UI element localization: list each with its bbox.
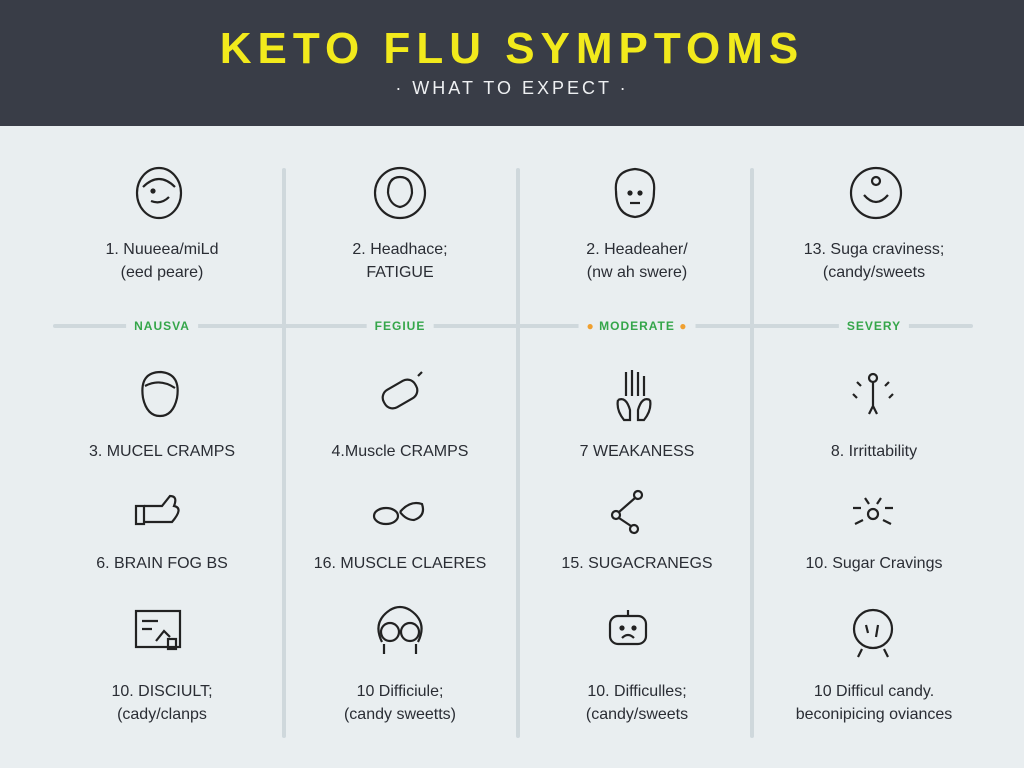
label: nausva: NAUSVA <box>134 319 190 333</box>
text 8: 8. Irrittability <box>831 443 917 460</box>
text 1: (eed peare) <box>121 264 203 281</box>
text 2 <box>352 241 448 281</box>
label: fegiue <box>367 318 433 334</box>
text 14: (candy sweetts) <box>344 706 456 723</box>
text 7: 7 WEAKANESS <box>580 443 694 460</box>
text 13: 10. DISCIULT; <box>111 683 213 700</box>
text 4: (candy/sweets <box>823 264 925 281</box>
text 3: (nw ah swere) <box>587 264 687 281</box>
icon: smiley <box>850 166 902 220</box>
icon: cramp2 <box>372 502 424 526</box>
header <box>0 0 1024 126</box>
text 3: 2. Headeaher/ <box>586 241 688 258</box>
icon: face 1 <box>136 166 182 220</box>
text 4: 13. Suga craviness; <box>804 241 944 258</box>
text 12: 10. Sugar Cravings <box>806 555 942 572</box>
icon: chart <box>134 610 182 650</box>
text 14: 10 Difficiule; <box>357 683 443 700</box>
icon: cramp <box>382 371 423 410</box>
icon: face 3 <box>614 168 656 218</box>
label: fegiue: FEGIUE <box>375 319 425 333</box>
icon: sparks <box>853 497 893 525</box>
text 16 <box>796 683 952 723</box>
text 1: 1. Nuueea/miLd <box>106 241 218 258</box>
text 2: 2. Headhace; <box>352 241 448 258</box>
icon: sad box <box>608 610 648 646</box>
text 15 <box>586 683 688 723</box>
text 14 <box>344 683 456 723</box>
text 4 <box>804 241 944 281</box>
text 16: beconipicing oviances <box>796 706 952 723</box>
icon: hand <box>134 494 180 526</box>
text 9: 6. BRAIN FOG BS <box>96 555 228 572</box>
text 6: 4.Muscle CRAMPS <box>332 443 468 460</box>
icon: face 2 <box>374 166 426 220</box>
icon: nodes <box>610 490 644 534</box>
text 3 <box>586 241 688 281</box>
icon: hands <box>616 370 652 422</box>
text 5: 3. MUCEL CRAMPS <box>89 443 235 460</box>
text 1 <box>106 241 218 281</box>
text 13 <box>111 683 213 723</box>
text 15: (candy/sweets <box>586 706 688 723</box>
text 16: 10 Difficul candy. <box>814 683 934 700</box>
icon: face4 <box>852 608 894 658</box>
label: severy <box>839 318 909 334</box>
subtitle: · WHAT TO EXPECT · <box>395 78 629 98</box>
text 15: 10. Difficulles; <box>587 683 687 700</box>
text 2: FATIGUE <box>366 264 434 281</box>
icon: head2 <box>377 606 423 654</box>
label: severy: SEVERY <box>847 319 901 333</box>
title: KETO FLU SYMPTOMS <box>220 24 804 73</box>
icon: irritability <box>852 372 894 414</box>
text 11: 15. SUGACRANEGS <box>561 555 713 572</box>
text 10: 16. MUSCLE CLAERES <box>314 555 486 572</box>
icon: face row2 <box>141 370 179 418</box>
label: nausva <box>126 318 198 334</box>
text 13: (cady/clanps <box>117 706 207 723</box>
label: moderate: ● MODERATE ● <box>587 319 687 333</box>
